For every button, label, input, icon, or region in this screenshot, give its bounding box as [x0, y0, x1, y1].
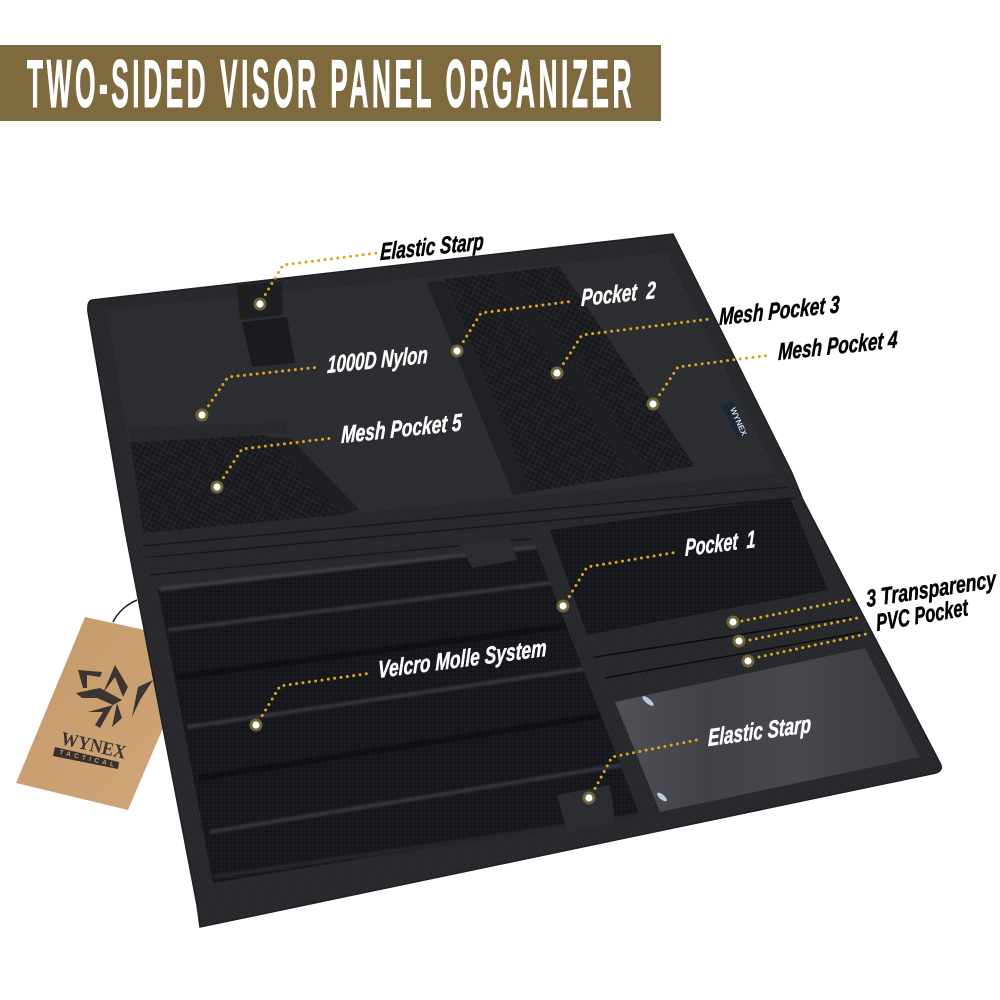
callout: top elastic strap [254, 228, 484, 310]
panel: mesh pocket 5 [128, 422, 360, 533]
callout: mesh pocket 4: Mesh Pocket 4 [778, 326, 898, 366]
panel: velcro pocket 1 [550, 498, 828, 635]
panel: mesh pocket 3 [509, 266, 695, 474]
tag cord [113, 600, 145, 640]
bottom elastic strap [557, 785, 615, 832]
glare [641, 695, 655, 707]
callout: pocket 1 [556, 526, 756, 612]
callout: transparency PVC pockets [726, 566, 998, 668]
panel: transparency strips [587, 597, 865, 700]
callout: pocket 1: Pocket 1 [685, 526, 756, 562]
callout: top elastic strap: Elastic Starp [380, 228, 484, 266]
callout: bottom elastic strap [582, 711, 811, 804]
tag brand name: WYNEX [59, 728, 128, 764]
callout: velcro molle system [250, 635, 547, 732]
PVC window [615, 648, 920, 812]
panel: mesh pocket 2 [444, 274, 634, 492]
callout: 1000D nylon: 1000D Nylon [327, 342, 428, 379]
brand label: WYNEX [728, 406, 749, 438]
callout: mesh pocket 5: Mesh Pocket 5 [341, 409, 462, 449]
callout: mesh pocket 3 [550, 291, 840, 380]
callout: mesh pocket 5 [210, 409, 462, 494]
organizer panel [88, 234, 941, 927]
callout: 1000D nylon [196, 342, 428, 422]
icon: wolf logo [76, 665, 153, 728]
callout: mesh pocket 3: Mesh Pocket 3 [719, 291, 840, 331]
brand label [721, 402, 749, 438]
top elastic strap [237, 282, 295, 367]
molle stitching rows [160, 546, 640, 877]
lower-left center tab [460, 538, 517, 568]
hang tag [16, 600, 175, 810]
webbing row above velcro [143, 528, 545, 590]
center fold band [143, 475, 795, 558]
center divider strip [427, 281, 530, 495]
callout: bottom elastic strap: Elastic Starp [708, 711, 811, 752]
panel body binding [88, 234, 941, 927]
title banner [0, 45, 661, 122]
callout: mesh pocket 4 [646, 326, 898, 410]
upper nylon panel [107, 253, 777, 533]
callout: pocket 2: Pocket 2 [581, 277, 657, 312]
center lower divider strip [530, 529, 658, 816]
tag tactical bar: TACTICAL [59, 749, 115, 769]
tag card [16, 617, 175, 810]
strip between mesh pockets [491, 272, 650, 476]
callout: velcro molle system: Velcro Molle System [378, 635, 547, 684]
callout: pocket 2 [450, 277, 657, 358]
panel: velcro molle system [158, 546, 640, 883]
